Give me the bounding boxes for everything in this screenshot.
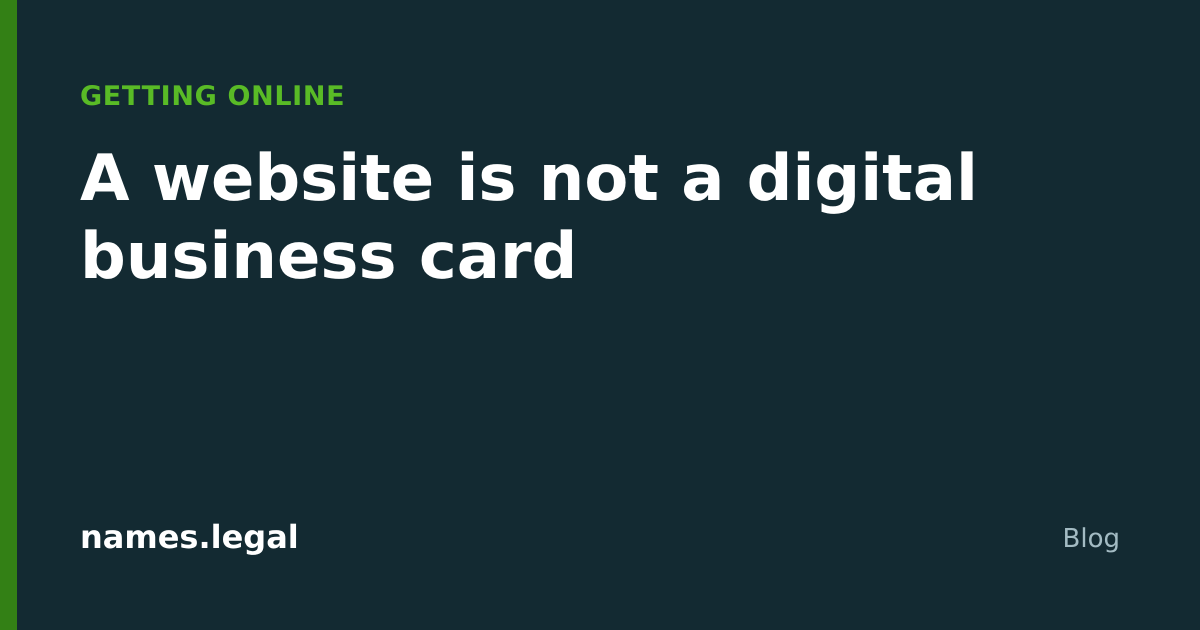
accent bar xyxy=(0,0,17,630)
title xyxy=(80,142,978,294)
title: A website is not a digital xyxy=(80,142,978,216)
eyebrow: category label: GETTING ONLINE xyxy=(80,81,345,112)
brand name: names.legal xyxy=(80,518,299,556)
title: business card xyxy=(80,220,577,294)
section label: Blog: Blog xyxy=(1063,524,1120,554)
